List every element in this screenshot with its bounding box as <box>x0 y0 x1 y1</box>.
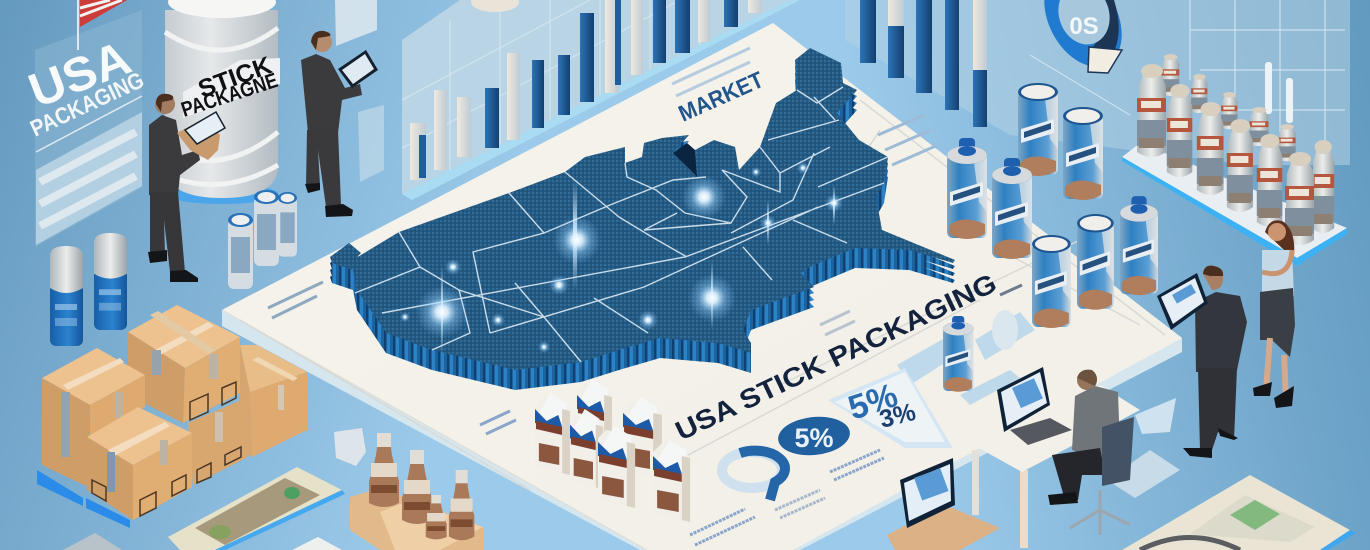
flag <box>77 0 127 50</box>
right box <box>240 345 307 457</box>
banknote bottom centre <box>168 467 345 550</box>
left glass panel with title: USA <box>22 32 138 118</box>
left glass panel with title: PACKAGING <box>26 66 148 142</box>
pale blue smears on paper <box>897 312 1035 405</box>
banknote bottom right <box>1122 475 1356 550</box>
map light glows <box>400 162 843 355</box>
glass chart panel: top centre bar chart <box>402 0 800 200</box>
map of the USA <box>330 48 955 370</box>
businesswoman <box>1253 220 1295 408</box>
small print on paper <box>268 48 1022 545</box>
bottles on small crates <box>350 433 483 550</box>
percentage callouts: 3% <box>877 398 919 434</box>
front box <box>87 407 192 520</box>
barrel with label <box>165 0 281 204</box>
left box <box>42 348 145 487</box>
top right glass wall and bar chart <box>845 0 1350 165</box>
blue canisters left <box>50 233 127 346</box>
main title on paper: USA STICK PACKAGING <box>671 268 1001 446</box>
presenter with tablet <box>301 31 378 217</box>
small package and grid mat <box>63 428 366 550</box>
blue floor glow <box>37 470 130 528</box>
market heading: MARKET <box>674 66 767 127</box>
map extrusion <box>330 54 955 390</box>
state borders <box>355 87 888 362</box>
donut chart on paper <box>722 451 785 500</box>
presenter with clipboard <box>148 94 225 282</box>
percentage callouts: 5% <box>844 376 902 428</box>
middle box <box>188 397 248 485</box>
barrel with label: PACKAGNE <box>178 69 281 122</box>
percentage callouts <box>828 368 953 448</box>
cartons on paper <box>535 379 690 522</box>
back top box <box>128 305 240 423</box>
desk with worker and laptop <box>968 367 1180 548</box>
paper sheet <box>222 23 1182 550</box>
monitor on cardboard box <box>887 458 1000 550</box>
left glass panel with title <box>22 0 148 247</box>
glass posters behind presenters <box>335 0 384 182</box>
blue oval with percentage: 5% <box>794 423 834 453</box>
businessman with tablet <box>1157 266 1247 458</box>
shelf of bottles top right <box>1122 54 1347 266</box>
bottles on paper <box>943 310 1018 392</box>
barrel with label: STICK <box>194 51 275 104</box>
blue oval with percentage <box>776 413 852 459</box>
donut gauge <box>1029 0 1137 80</box>
stack of boxes <box>37 305 307 528</box>
small cans by presenters <box>228 190 297 289</box>
donut gauge: 0S <box>1069 13 1099 40</box>
milk cans on table <box>947 83 1158 328</box>
